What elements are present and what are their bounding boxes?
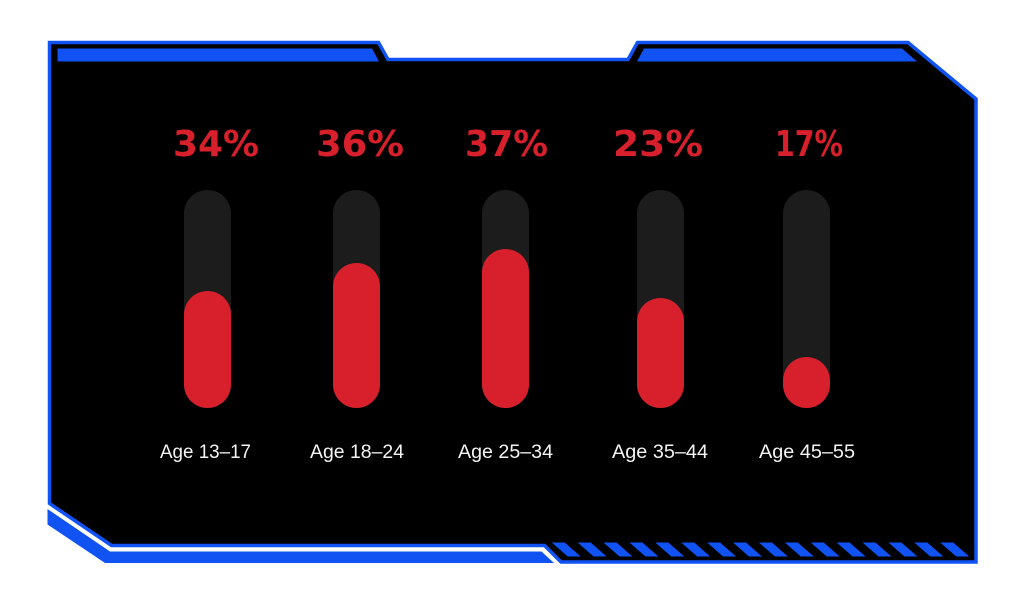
bar track [482, 190, 529, 408]
value 37%: 37% [465, 124, 548, 165]
bar fill [184, 291, 231, 408]
value 34%: 34% [173, 124, 259, 165]
bar track [333, 190, 380, 408]
column: Age 18-24 [310, 124, 404, 463]
top right accent bar [637, 48, 917, 62]
bottom right hazard stripes [552, 542, 969, 556]
age label: Age 18–24 [310, 441, 404, 463]
bar fill [637, 298, 684, 408]
bar fill [783, 357, 830, 408]
panel: frame [50, 42, 976, 562]
value 36%: 36% [316, 124, 404, 165]
bar track [184, 190, 231, 408]
column: Age 25-34 [458, 124, 553, 463]
bar fill [482, 249, 529, 408]
bar track [783, 190, 830, 408]
column: Age 13-17 [160, 124, 259, 463]
value 17%: 17% [775, 124, 843, 165]
age label: Age 13–17 [160, 441, 251, 463]
column: Age 35-44 [612, 124, 708, 463]
age label: Age 45–55 [759, 441, 855, 463]
value 23%: 23% [613, 124, 703, 165]
column: Age 45-55 [759, 124, 855, 463]
age label: Age 35–44 [612, 441, 708, 463]
bar track [637, 190, 684, 408]
bar fill [333, 263, 380, 408]
bottom left accent band [48, 509, 554, 563]
age label: Age 25–34 [458, 441, 553, 463]
top left accent bar [58, 48, 379, 62]
